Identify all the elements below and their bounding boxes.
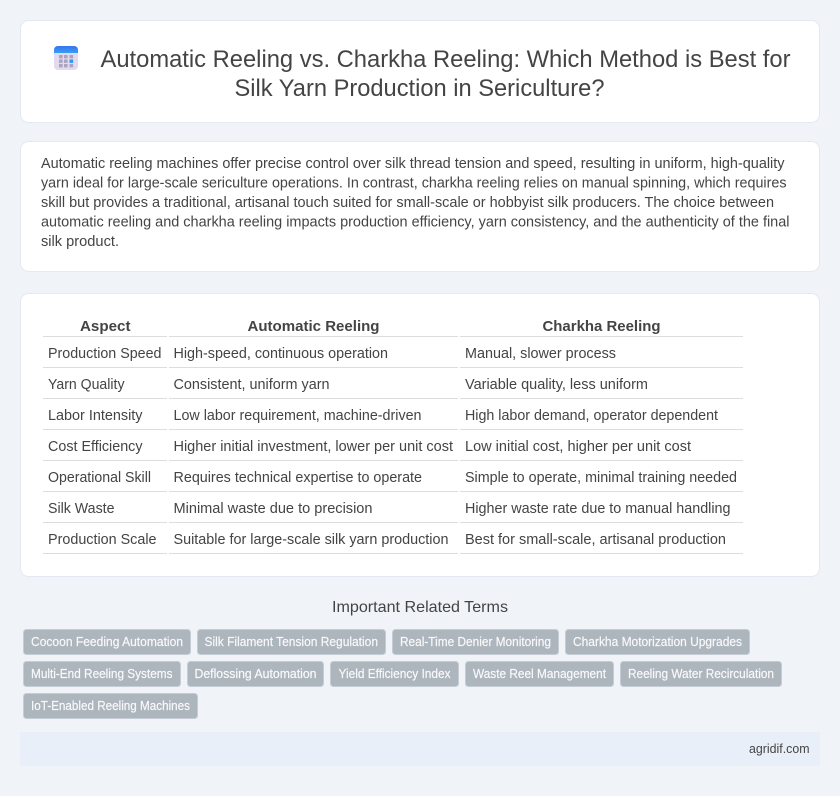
tag: Multi-End Reeling Systems <box>31 667 172 681</box>
tag <box>392 630 558 654</box>
panel: comparison table card <box>20 294 820 576</box>
table header: Charkha Reeling <box>542 318 660 335</box>
tag <box>188 662 324 686</box>
tag <box>566 630 750 654</box>
row: silk waste <box>48 501 730 517</box>
intro paragraph: Automatic reeling machines offer precise control over silk thread tension and speed, resulting in uniform, high-quality <box>41 156 785 172</box>
tag: IoT-Enabled Reeling Machines <box>31 699 190 713</box>
row: yarn quality: Variable quality, less uniform <box>465 377 648 393</box>
row: silk waste: Higher waste rate due to manual handling <box>465 501 730 517</box>
row: yarn quality <box>48 377 648 393</box>
tag <box>24 630 190 654</box>
table header <box>80 318 660 335</box>
row: cost efficiency <box>48 439 691 455</box>
tag: Yield Efficiency Index <box>338 667 451 681</box>
row: labor intensity: High labor demand, operator dependent <box>465 408 718 424</box>
row: production scale: Suitable for large-scale silk yarn production <box>174 532 448 548</box>
tag <box>330 662 458 686</box>
row: production speed <box>48 346 616 362</box>
row: production scale: Best for small-scale, artisanal production <box>465 532 726 548</box>
table header: Automatic Reeling <box>248 318 380 335</box>
row: operational skill <box>48 470 737 486</box>
intro paragraph: yarn ideal for large-scale sericulture operations. In contrast, charkha reeling relies on manual spinning, which requires <box>41 176 786 192</box>
row: yarn quality: Yarn Quality <box>48 377 125 393</box>
heading: important related terms: Important Related Terms <box>332 599 508 616</box>
intro paragraph: silk product. <box>41 234 119 250</box>
tag <box>620 662 782 686</box>
row: labor intensity: Low labor requirement, machine-driven <box>174 408 422 424</box>
row: cost efficiency: Low initial cost, higher per unit cost <box>465 439 691 455</box>
tag: Deflossing Automation <box>194 667 317 681</box>
title <box>100 46 791 102</box>
icon: calendar <box>54 46 78 70</box>
row: silk waste: Minimal waste due to precision <box>174 501 372 517</box>
intro paragraph: automatic reeling and charkha reeling impacts production efficiency, yarn consistency, and the authenticity of the final <box>41 214 790 230</box>
row: yarn quality: Consistent, uniform yarn <box>174 377 330 393</box>
row: production speed: Manual, slower process <box>465 346 616 362</box>
row: operational skill: Operational Skill <box>48 470 151 486</box>
tag: Waste Reel Management <box>473 667 606 681</box>
row: production speed: High-speed, continuous operation <box>174 346 388 362</box>
intro paragraph <box>41 156 790 250</box>
intro paragraph: skill but provides a traditional, artisanal touch suited for small-scale or hobbyist silk producers. The choice between <box>41 195 774 211</box>
panel: title card <box>20 20 820 122</box>
row: production scale <box>48 532 726 548</box>
row: cost efficiency: Higher initial investment, lower per unit cost <box>174 439 453 455</box>
footer bar: agridif.com <box>749 741 810 756</box>
panel: intro text card <box>20 142 820 272</box>
related terms tags <box>24 630 782 718</box>
tag: Charkha Motorization Upgrades <box>573 635 742 649</box>
tag <box>24 662 180 686</box>
row: production scale: Production Scale <box>48 532 156 548</box>
tag: Reeling Water Recirculation <box>628 667 774 681</box>
tag <box>466 662 614 686</box>
tag: Silk Filament Tension Regulation <box>204 635 378 649</box>
row: labor intensity <box>48 408 718 424</box>
row: production speed: Production Speed <box>48 346 162 362</box>
tag: Cocoon Feeding Automation <box>31 635 183 649</box>
title: Silk Yarn Production in Sericulture? <box>234 75 604 102</box>
row: silk waste: Silk Waste <box>48 501 114 517</box>
tag <box>24 694 198 718</box>
row: operational skill: Simple to operate, minimal training needed <box>465 470 737 486</box>
tag <box>198 630 386 654</box>
row: cost efficiency: Cost Efficiency <box>48 439 143 455</box>
tag: Real-Time Denier Monitoring <box>400 635 551 649</box>
table header: Aspect <box>80 318 130 335</box>
title: Automatic Reeling vs. Charkha Reeling: Which Method is Best for <box>100 46 791 73</box>
row: operational skill: Requires technical expertise to operate <box>174 470 422 486</box>
footer bar <box>20 732 820 766</box>
row: labor intensity: Labor Intensity <box>48 408 143 424</box>
